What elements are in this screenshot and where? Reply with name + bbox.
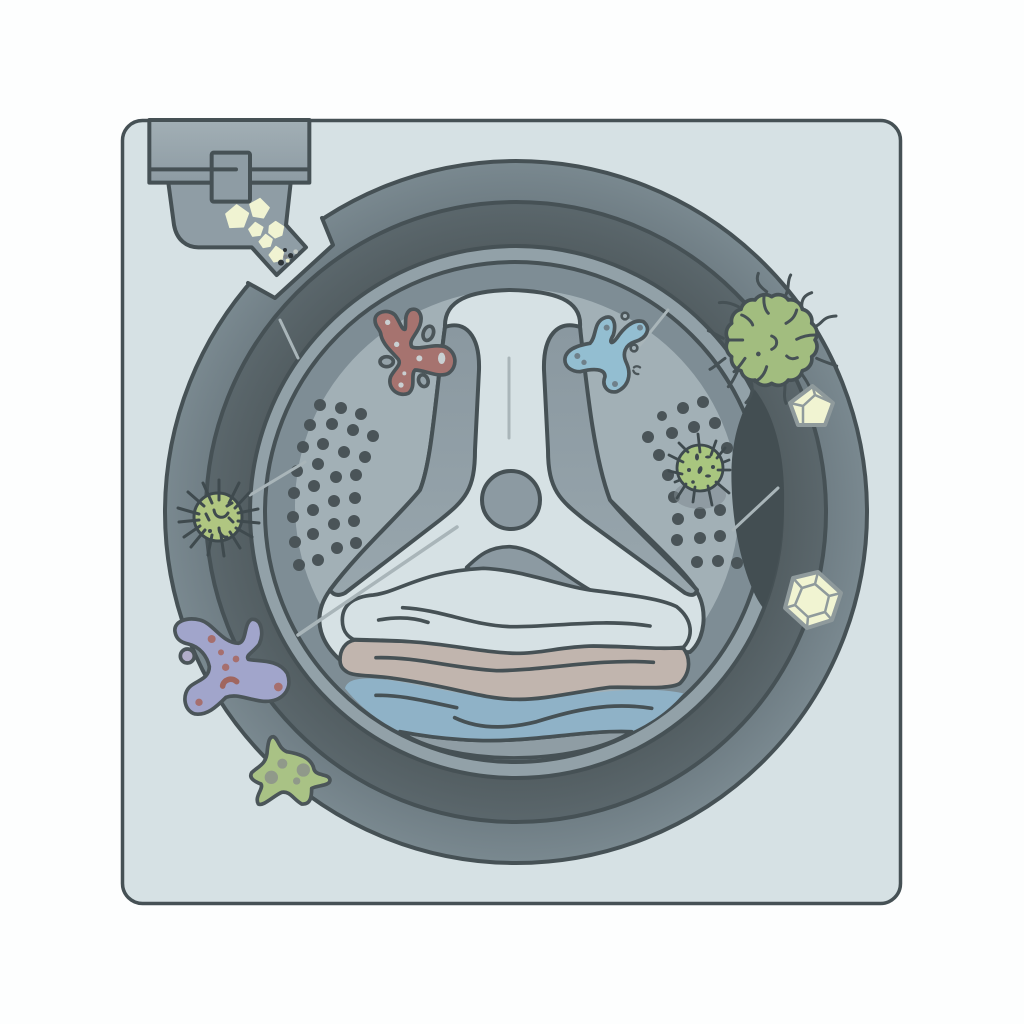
fold lines — [403, 608, 650, 627]
drawer seam — [150, 163, 309, 175]
dirt specks — [278, 248, 298, 266]
chute body — [168, 183, 306, 275]
drum bottom wedge — [400, 731, 632, 758]
laundry stack — [340, 547, 690, 758]
detergent granules — [226, 199, 283, 262]
agitator left lobe — [330, 325, 479, 595]
dispenser drawer — [149, 120, 309, 183]
germ: large green virus — [708, 273, 837, 403]
agitator hub — [482, 471, 540, 529]
crystal: hexagonal detergent — [785, 572, 841, 628]
agitator right lobe — [544, 325, 697, 595]
blue towel — [345, 678, 683, 741]
long glass reflection — [298, 527, 457, 635]
shadow patch under right virus — [674, 481, 726, 509]
glass reflection lines — [250, 293, 778, 530]
germ: green amoeba — [251, 737, 330, 804]
agitator silhouette — [319, 290, 704, 660]
drum perforations left — [287, 399, 379, 571]
agitator highlight — [508, 358, 510, 438]
beige towel — [340, 640, 689, 699]
door ring: dark gasket — [206, 202, 826, 822]
drum: back wall — [265, 262, 765, 762]
white towel — [342, 568, 690, 653]
drum perforations right — [642, 396, 743, 569]
agitator paddle — [319, 290, 704, 660]
germ: small green virus right — [669, 434, 730, 505]
detergent dispenser — [149, 120, 309, 275]
virus body — [726, 295, 817, 385]
germ: blue amoeba — [565, 313, 647, 392]
drawer handle — [212, 153, 250, 202]
drum: lighter interior — [295, 289, 739, 721]
virus inner marks — [727, 297, 815, 382]
door ring: outer band — [165, 161, 867, 863]
panel: machine front — [122, 120, 900, 904]
germ: red amoeba — [375, 309, 455, 394]
agitator hump — [467, 547, 590, 593]
door ring: light inner rim — [250, 246, 782, 778]
outer hairs — [708, 273, 837, 403]
crystal: pentagonal detergent — [790, 386, 833, 425]
germ: small green virus left — [178, 480, 259, 556]
germ: purple amoeba — [175, 619, 289, 714]
dark shadow crescent on right of door — [731, 390, 784, 608]
